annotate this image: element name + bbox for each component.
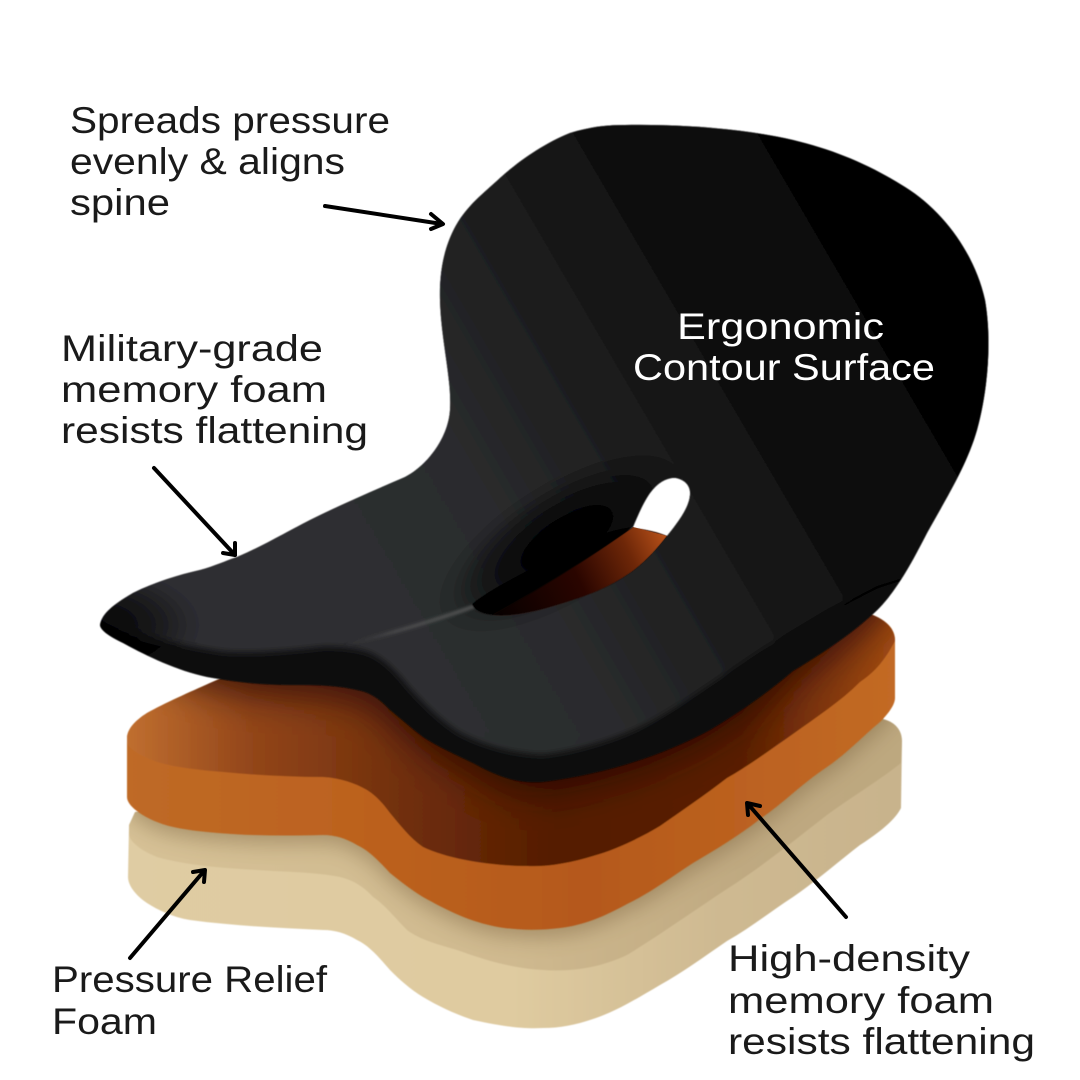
label: high-density memory foam: resists flattening — [728, 1021, 1035, 1062]
label: spreads pressure: Spreads pressure — [70, 100, 390, 141]
label: spreads pressure: evenly & aligns — [70, 141, 345, 182]
arrow: to seat edge — [154, 468, 235, 555]
label: pressure relief foam: Foam — [52, 1001, 157, 1042]
label: pressure relief foam — [52, 959, 328, 1042]
label: pressure relief foam: Pressure Relief — [52, 959, 328, 1000]
label: ergonomic contour surface: Contour Surface — [633, 347, 935, 388]
label: military-grade memory foam: Military-grade — [61, 328, 323, 369]
label: ergonomic contour surface: Ergonomic — [677, 306, 884, 347]
cushion: black ergonomic contour seat — [99, 124, 990, 783]
cushion: pressure relief foam layer (beige) — [128, 718, 903, 1029]
label: military-grade memory foam: resists flattening — [61, 410, 368, 451]
label: spreads pressure — [70, 100, 390, 223]
label: spreads pressure: spine — [70, 182, 170, 223]
label: ergonomic contour surface — [633, 306, 935, 388]
cushion: hole interior showing orange layer — [493, 527, 667, 615]
arrow: to back rest — [325, 206, 443, 229]
label: high-density memory foam: High-density — [728, 938, 971, 979]
arrow: to beige foam — [130, 870, 205, 958]
label: military-grade memory foam: memory foam — [61, 369, 327, 410]
arrow: to orange foam — [747, 803, 846, 917]
label: military-grade memory foam — [61, 328, 368, 451]
label: high-density memory foam — [728, 938, 1035, 1062]
label: high-density memory foam: memory foam — [728, 980, 994, 1021]
cushion: high-density memory foam layer (orange) — [126, 527, 896, 930]
